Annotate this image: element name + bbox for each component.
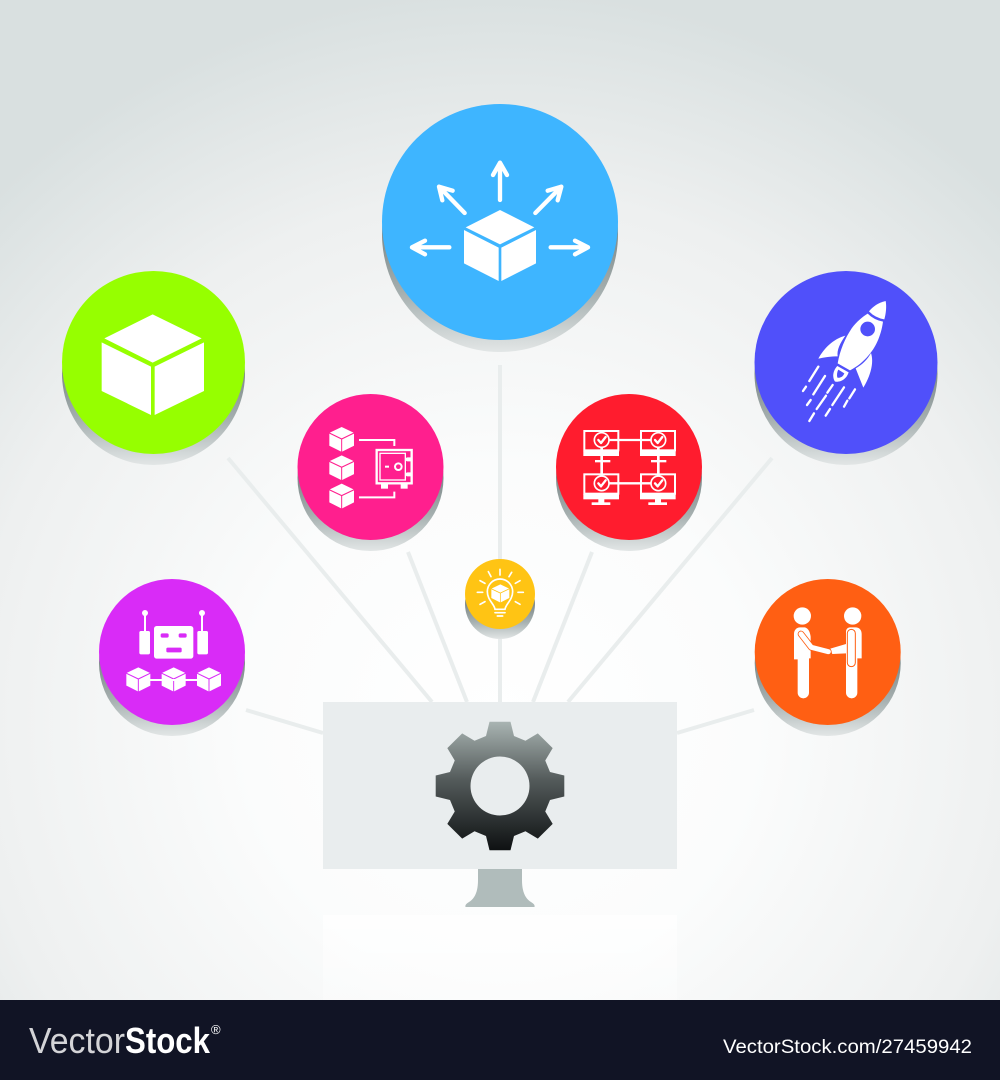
registered mark: ® (211, 1022, 221, 1037)
panel: violet rocket circle (754, 271, 938, 465)
panel: blue distribution circle (382, 104, 618, 352)
watermark logo (29, 1020, 211, 1061)
icon: robot with block chain (126, 610, 221, 691)
floor reflection (323, 915, 677, 1000)
monitor stand (465, 869, 535, 907)
icon: cubes into safe (329, 427, 412, 508)
icon: light bulb with cube (477, 569, 523, 616)
icon: verified computer network (583, 431, 676, 505)
icon: cube (102, 314, 204, 415)
watermark logo: Vector (29, 1020, 125, 1061)
watermark url: VectorStock.com/27459942 (723, 1036, 972, 1058)
panel: pink vault circle (298, 394, 444, 551)
connector lines (228, 365, 772, 733)
icon: cube with outward arrows (412, 163, 588, 281)
panel: red network circle (556, 394, 702, 551)
monitor screen (323, 702, 677, 869)
icon: handshake (794, 607, 862, 698)
icon: gear (436, 722, 564, 850)
monitor with gear (323, 702, 677, 907)
icon: rocket (803, 301, 886, 421)
watermark logo: Stock (125, 1020, 211, 1061)
footer bar (0, 1000, 1000, 1080)
panel: magenta robot circle (99, 579, 245, 736)
panel: green cube circle (62, 271, 245, 465)
panel: orange handshake circle (755, 579, 901, 736)
panel: yellow idea circle (465, 559, 535, 639)
